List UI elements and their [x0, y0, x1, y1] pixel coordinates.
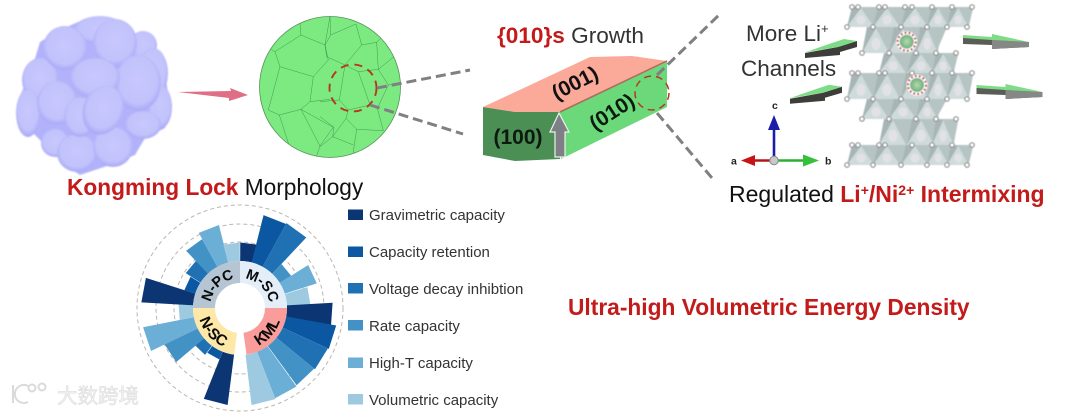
- heading: Regulated Li+/Ni2+ Intermixing: 2+: [898, 182, 914, 198]
- axes: a b c: [731, 100, 831, 168]
- label: (100): (100): [493, 126, 543, 149]
- heading: Regulated Li+/Ni2+ Intermixing: /Ni: [869, 181, 898, 207]
- arrow: growth direction: [550, 113, 569, 157]
- legend: Voltage decay inhibtion: [369, 281, 523, 298]
- bars: KML: [228, 296, 336, 405]
- ring labels: N-SC: [200, 316, 228, 346]
- icon: intermixed atom lower: [906, 74, 928, 96]
- ring labels: KML: [254, 320, 280, 346]
- arrow: Li channel lower right: [976, 84, 1042, 99]
- legend: [348, 207, 523, 409]
- arrow: Li channel upper left: [804, 39, 857, 58]
- arrow: particle to cross-section: [178, 88, 248, 101]
- face: (001) top: [483, 56, 667, 112]
- dashed zoom lines: grain to plate: [370, 70, 470, 134]
- legend: Rate capacity: [369, 318, 460, 335]
- text: More Li+ Channels: [741, 21, 836, 81]
- heading: Regulated Li+/Ni2+ Intermixing: Intermixing: [914, 181, 1045, 207]
- icon: Kongming lock particle: [16, 16, 172, 175]
- icon: intermixed atom upper: [896, 31, 917, 52]
- legend: Capacity retention: [369, 244, 490, 261]
- ring labels: [200, 268, 280, 346]
- arrow: Li channel lower left: [790, 85, 842, 104]
- watermark: [13, 379, 139, 409]
- heading: Regulated Li+/Ni2+ Intermixing: Regulated Li: [729, 181, 861, 207]
- ring segments: [204, 272, 276, 344]
- axes: a b c: a: [731, 156, 737, 168]
- watermark: 大数跨境: [57, 379, 139, 409]
- crystal structure: [845, 5, 974, 167]
- callout: dashed red circle on plate: [635, 76, 669, 110]
- face: (100) front: [483, 107, 560, 161]
- heading: Ultra-high Volumetric Energy Density: Ultra-high Volumetric Energy Density: [568, 294, 970, 320]
- legend: Volumetric capacity: [369, 392, 499, 409]
- dashed zoom lines: plate to structure: [657, 15, 719, 178]
- callout: dashed red circle on grain: [330, 64, 376, 112]
- text: More Li+ Channels: +: [821, 21, 829, 36]
- bars: N-SC: [143, 296, 252, 405]
- icon: crystal plate: [483, 56, 669, 161]
- legend: High-T capacity: [369, 355, 473, 372]
- arrow: Li channel upper right: [963, 34, 1029, 49]
- bars: M-SC: [229, 215, 317, 317]
- axes: a b c: b: [825, 156, 831, 168]
- label: (001): (001): [548, 62, 602, 105]
- ring labels: M-SC: [246, 268, 278, 302]
- text: More Li+ Channels: Channels: [741, 56, 836, 81]
- axes: a b c: c: [772, 100, 778, 112]
- heading: Kongming Lock Morphology: Kongming Lock Morphology: [67, 174, 364, 200]
- legend: Gravimetric capacity: [369, 207, 505, 224]
- icon: grain cross-section: [260, 16, 400, 158]
- heading: {010}s Growth: {010}s Growth: [497, 23, 644, 48]
- face: (010) side: [560, 62, 667, 159]
- bars: N-PC: [141, 225, 250, 320]
- label: (010): (010): [585, 89, 639, 135]
- ring labels: N-PC: [201, 270, 233, 302]
- text: More Li+ Channels: More Li: [746, 21, 821, 46]
- radial bar chart: [136, 204, 344, 412]
- heading: Regulated Li+/Ni2+ Intermixing: +: [861, 182, 869, 198]
